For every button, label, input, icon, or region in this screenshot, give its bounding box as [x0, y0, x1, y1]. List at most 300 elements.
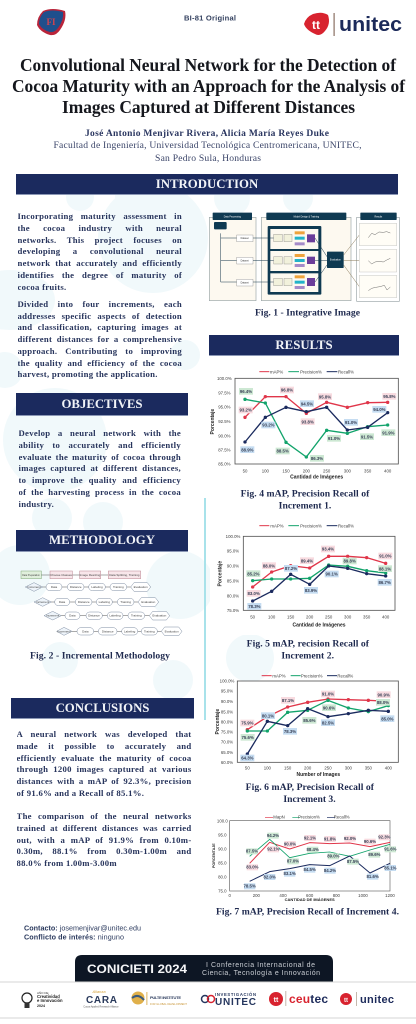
logo: unitec small: unitec: [360, 994, 394, 1006]
increment 1: Training: [113, 585, 124, 589]
increment 4: Training: [144, 629, 155, 633]
axes: 95.0%: [221, 689, 233, 694]
text: introduction: the quality and efficiency of the cocoa: [18, 358, 182, 368]
data labels: [246, 546, 392, 610]
legend: [259, 523, 354, 528]
increment 2: Training: [120, 600, 131, 604]
axes: 200: [306, 615, 314, 620]
axes: 200: [303, 468, 311, 473]
axes: CANTIDAD DE IMÁGENES: [285, 897, 335, 902]
logo: investigación unitec: UNITEC: [215, 997, 256, 1008]
text: introduction: [18, 211, 182, 379]
increment 2: Data: [59, 600, 65, 604]
increment 4: Labeling: [124, 629, 136, 633]
axes: 300: [345, 766, 353, 771]
heading: methodology: METHODOLOGY: [49, 533, 155, 547]
logo: pulte institute: FOR GLOBAL DEVELOPMENT: [150, 1002, 187, 1006]
axes: 75.0%: [227, 608, 239, 613]
text: conclusions: distances with a mAP of 92.3%, precision: [16, 776, 192, 786]
axes: 80.0: [218, 875, 227, 880]
data labels: 82.5%: [322, 720, 334, 725]
legend: Precision%: [300, 523, 322, 528]
legend: MapN: [273, 815, 285, 820]
data labels: 87.5%: [347, 859, 359, 864]
data labels: 89.6%: [368, 852, 381, 857]
chart: fig 6 increment 3: [215, 673, 399, 805]
heading: results: [209, 335, 399, 355]
axes: 100: [264, 766, 272, 771]
data labels: 93.4%: [322, 547, 334, 552]
text: conclusions: The comparison of the neural networks: [16, 811, 192, 821]
contact block: Conflicto de interés: ninguno: [24, 932, 124, 942]
axes: 85.0: [218, 861, 227, 866]
caption: fig 6: [246, 782, 375, 805]
axes: 65.0%: [221, 750, 233, 755]
increment 3: Training: [131, 614, 142, 618]
data labels: 87.5%: [246, 849, 258, 854]
axes: 150: [282, 468, 290, 473]
caption: fig 5: Increment 2.: [281, 650, 334, 661]
axes: 90.0%: [221, 699, 233, 704]
data labels: 88.0%: [377, 700, 389, 705]
data labels: 82.0%: [264, 874, 276, 879]
data labels: 96.4%: [240, 389, 252, 394]
text: introduction: Divided into four increments, each: [18, 299, 182, 309]
data labels: 91.5%: [361, 434, 373, 439]
data labels: 83.1%: [284, 871, 296, 876]
axes: 90.0%: [227, 564, 239, 569]
axes: 300: [344, 468, 352, 473]
axes: 200: [304, 766, 312, 771]
axes: 95.0%: [218, 405, 231, 410]
legend: Recall%: [338, 523, 354, 528]
data labels: 91.8%: [324, 836, 336, 841]
preparation row: [21, 571, 141, 579]
logo: ceutec: [269, 991, 328, 1006]
conference banner: [75, 955, 333, 982]
logo: faculty shield: [37, 9, 66, 36]
increment 3: [44, 611, 170, 620]
legend: mAP%: [272, 673, 286, 678]
data labels: 78.5%: [244, 884, 256, 889]
axes: 300: [344, 615, 352, 620]
text: objectives: images captured at different distances,: [18, 463, 181, 473]
axes: 75.0: [218, 889, 227, 894]
legend: [265, 815, 350, 820]
axes: Cantidad de Imágenes: [292, 623, 346, 629]
data labels: 87.0%: [287, 859, 299, 864]
data labels: 93.2%: [262, 423, 275, 428]
data labels: 75.6%: [242, 735, 254, 740]
axes: [215, 679, 398, 778]
axes: [212, 818, 395, 902]
logo: CARA: Alianza: [91, 989, 106, 994]
data labels: 86.3%: [311, 456, 323, 461]
axes: 90.0%: [218, 433, 231, 438]
axes: 150: [284, 766, 292, 771]
text: introduction: the cocoa industry with neural: [18, 223, 182, 233]
logo: CARA: Cocoa Applied Research Alliance: [83, 1006, 119, 1008]
axes: 100: [268, 615, 276, 620]
data labels: 95.8%: [383, 394, 396, 399]
axes: 250: [325, 615, 333, 620]
axes: 100: [262, 468, 270, 473]
legend: Precision%: [301, 673, 323, 678]
axes: 60.0%: [221, 760, 233, 765]
data labels: [244, 833, 397, 889]
caption: fig 4: Fig. 4 mAP, Precision Recall of: [241, 489, 370, 500]
logo: unitec small: [340, 992, 394, 1006]
data labels: 96.8%: [281, 388, 293, 393]
data labels: 81.6%: [367, 874, 379, 879]
data labels: 87.2%: [285, 566, 297, 571]
data labels: 85.2%: [247, 571, 260, 576]
caption: fig 2: Fig. 2 - Incremental Methodology: [30, 651, 170, 662]
legend: [262, 673, 353, 678]
text: introduction: identifies the degree of maturity of: [18, 270, 182, 280]
authors and affiliation: [54, 129, 362, 164]
caption: fig 4: [241, 489, 370, 511]
data labels: 85.0%: [381, 716, 394, 721]
increment 1: Labeling: [91, 585, 103, 589]
data labels: 83.0%: [246, 865, 259, 870]
text: conclusions: trained at different distances was carried: [16, 823, 192, 833]
axes: Porcentaje: [210, 409, 216, 434]
data labels: 78.3%: [248, 604, 261, 609]
axes: 250: [323, 468, 331, 473]
increment 3: Evaluation: [152, 614, 167, 618]
axes: 400: [385, 766, 393, 771]
text: conclusions: made it possible to accurately and: [16, 741, 192, 751]
data labels: 64.3%: [241, 756, 254, 761]
data labels: 91.0%: [328, 436, 340, 441]
text: objectives: to improve the quality and efficiency: [18, 475, 181, 485]
increment 2: Evaluation: [141, 600, 156, 604]
panel: data processing: Dataset: [241, 237, 249, 240]
legend: Precision%: [300, 369, 322, 374]
legend: Recall%: [334, 815, 350, 820]
caption: fig 5: Fig. 5 mAP, recision Recall of: [247, 639, 370, 650]
increment 4: [57, 627, 182, 636]
data labels: 75.9%: [241, 721, 254, 726]
axes: 350: [363, 615, 371, 620]
axes: 95.0: [218, 832, 227, 837]
axes: 400: [382, 615, 390, 620]
logo: unitec small: tt: [344, 998, 348, 1004]
footer logo strip: [0, 982, 416, 1018]
axes: 200: [253, 893, 261, 898]
axes: [210, 376, 398, 481]
axes: 90.0: [218, 846, 227, 851]
data labels: 91.0%: [322, 692, 334, 697]
caption: fig 6: Increment 3.: [283, 794, 336, 805]
increment 2: Increment: [36, 600, 50, 604]
panel: model design and training: Evaluation: [330, 258, 341, 261]
series: mAP: [245, 397, 388, 417]
data labels: 88.9%: [241, 447, 254, 452]
caption: fig 6: Fig. 6 mAP, Precision Recall of: [246, 782, 375, 793]
authors and affiliation: José Antonio Menjivar Rivera, Alicia María Reyes Duke: [85, 129, 329, 139]
axes: Number of Images: [297, 772, 340, 778]
title: Images Captured at Different Distances: [62, 97, 355, 117]
text: introduction: and classification, capturing images at: [18, 322, 182, 332]
increment 1: Increment: [27, 585, 41, 589]
axes: [218, 534, 395, 629]
axes: 80.0%: [227, 593, 239, 598]
axes: 0: [228, 893, 231, 898]
text: introduction: network that accurately and efficiently: [18, 258, 182, 268]
legend: Precision%: [298, 815, 320, 820]
axes: 350: [365, 766, 373, 771]
logo: ceutec: ceutec: [289, 992, 328, 1006]
axes: 97.5%: [218, 390, 231, 395]
preparation row: Data Splitting, Training: [109, 573, 140, 577]
text: objectives: ability to accurately and efficiently: [18, 440, 181, 450]
logo: ceutec: tt: [274, 997, 279, 1004]
data labels: 94.2%: [267, 833, 279, 838]
panel: model design and training: Model Design & Training: [294, 215, 320, 218]
data labels: 91.9%: [382, 430, 395, 435]
data labels: 87.1%: [282, 698, 294, 703]
axes: PORCENTAJE: [212, 843, 216, 868]
logo: pulte institute: PULTE INSTITUTE: [150, 995, 181, 1000]
logo: pulte institute: [132, 992, 187, 1006]
title: Cocoa Maturity with an Approach for the Analysis of: [12, 76, 405, 96]
axes: 1000: [358, 893, 368, 898]
legend: [259, 369, 354, 374]
heading: results: RESULTS: [275, 338, 333, 352]
data labels: 88.0%: [263, 563, 275, 568]
axes: 80.0%: [221, 719, 233, 724]
data labels: 88.5%: [277, 449, 289, 454]
data labels: 90.0%: [284, 841, 296, 846]
axes: 50: [250, 615, 256, 620]
logo: año de creatividad: [22, 990, 63, 1008]
panel: data processing: [209, 213, 256, 301]
data labels: 78.3%: [284, 729, 296, 734]
series: recall: [245, 407, 388, 442]
data labels: 93.2%: [240, 408, 252, 413]
text: introduction: harvest, promoting the application.: [18, 369, 158, 379]
panel: data processing: Dataset: [241, 281, 249, 284]
data labels: 86.7%: [379, 580, 391, 585]
logo: unitec: tt: [312, 18, 320, 32]
data labels: 90.6%: [323, 705, 335, 710]
text: conclusions: 88.0% from 1.00m-3.00m: [16, 858, 117, 868]
panel: results graphs: Results: [374, 215, 383, 218]
legend: mAP%: [270, 369, 283, 374]
contact block: [24, 924, 141, 942]
data labels: 91.6%: [384, 847, 397, 852]
logo: unitec: [304, 12, 402, 36]
increment 3: Labeling: [109, 614, 121, 618]
series: precision: [253, 565, 386, 581]
series: precision: [250, 839, 390, 858]
data labels: 89.8%: [344, 559, 356, 564]
data labels: 92.3%: [378, 835, 391, 840]
logo: año de creatividad: Creatividad: [37, 994, 60, 999]
axes: 75.0%: [221, 730, 233, 735]
axes: 92.5%: [218, 419, 231, 424]
text: introduction: approach. Contributing to improving: [18, 346, 182, 356]
text: objectives: industry.: [18, 498, 54, 508]
panel: incremental methodology diagram: [20, 570, 182, 662]
preparation row: Data Preparation: [22, 574, 41, 577]
caption: fig 1: Fig. 1 - Integrative Image: [255, 307, 361, 318]
axes: 1200: [385, 893, 395, 898]
data labels: 90.9%: [378, 692, 390, 697]
caption: fig 4: Increment 1.: [279, 500, 331, 511]
axes: 100.0%: [220, 679, 234, 684]
heading: methodology: [16, 530, 188, 551]
increment 2: Labeling: [99, 600, 110, 604]
increment 4: Data: [82, 629, 89, 633]
axes: Porcentaje: [215, 709, 221, 734]
panel: data processing: Dataset: [241, 259, 249, 262]
data labels: 83.9%: [305, 588, 317, 593]
text: introduction: Incorporating maturity assessment in: [18, 211, 182, 221]
conference banner: I Conferencia Internacional de: [206, 962, 315, 969]
axes: 800: [333, 893, 341, 898]
data labels: 92.0%: [344, 836, 356, 841]
axes: 400: [279, 893, 287, 898]
axes: 100.0%: [226, 534, 240, 539]
axes: 50: [245, 766, 250, 771]
text: conclusions: through 1200 images captured at various: [16, 764, 192, 774]
series: precision: [247, 700, 388, 731]
data labels: 88.1%: [379, 566, 391, 571]
data labels: 89.0%: [327, 854, 340, 859]
axes: 87.5%: [218, 448, 231, 453]
text: introduction: cocoa fruits.: [18, 282, 66, 292]
series: mAP: [247, 699, 388, 730]
heading: conclusions: CONCLUSIONS: [56, 701, 149, 715]
logo: investigación unitec: [202, 992, 256, 1008]
text: introduction: addresses specific aspects of detection: [18, 310, 182, 320]
increment 1: Evaluation: [134, 585, 148, 589]
heading: introduction: INTRODUCTION: [156, 177, 258, 191]
axes: 350: [364, 468, 372, 473]
increment 1: Distance: [70, 585, 82, 589]
data labels: 93.8%: [302, 419, 314, 424]
increment 4: Increment: [57, 629, 71, 633]
increment 3: Increment: [46, 614, 60, 618]
logo: CARA: CARA: [86, 995, 117, 1006]
increment 3: Data: [69, 614, 76, 618]
text: objectives: Develop a neural network with the: [18, 428, 181, 438]
axes: 100.0%: [217, 376, 232, 381]
axes: 400: [384, 468, 392, 473]
authors and affiliation: Facultad de Ingeniería, Universidad Tecnológica Centromericana, UNITEC,: [54, 140, 362, 151]
increment 1: [25, 583, 151, 591]
text: conclusions: [16, 729, 192, 868]
axes: 70.0%: [221, 740, 233, 745]
series: mAP: [253, 556, 386, 587]
text: conclusions: A neural network was developed that: [16, 729, 192, 739]
chart: fig 5 increment 2: [210, 523, 396, 661]
authors and affiliation: San Pedro Sula, Honduras: [155, 153, 261, 164]
heading: conclusions: [11, 698, 194, 718]
logo: investigación unitec: INVESTIGACIÓN: [215, 992, 256, 997]
panel: model design and training: [253, 213, 351, 301]
heading: introduction: [16, 174, 398, 194]
increment 1: Data: [51, 585, 57, 589]
axes: 600: [306, 893, 314, 898]
data labels: 94.0%: [373, 407, 386, 412]
series: recall: [247, 709, 388, 754]
axes: 85.0%: [218, 462, 231, 467]
chart: fig 7 increment 4: [212, 815, 399, 918]
axes: 250: [324, 766, 332, 771]
data labels: 84.2%: [324, 868, 336, 873]
data labels: 84.5%: [304, 867, 316, 872]
axes: 95.0%: [227, 549, 239, 554]
event label: BI-81 Original: [184, 14, 236, 22]
logo: unitec: unitec: [339, 14, 402, 36]
axes: 50: [243, 468, 248, 473]
contact block: Contacto: josemenjivar@unitec.edu: [24, 924, 141, 932]
conference banner: CONICIETI 2024: [87, 964, 188, 976]
title: Convolutional Neural Network for the Detection of: [20, 55, 396, 75]
axes: 85.0%: [221, 709, 233, 714]
data labels: 80.1%: [262, 713, 274, 718]
chart: fig 4 increment 1: [210, 369, 399, 511]
increment 2: Distance: [78, 600, 90, 604]
preparation row: Choose Classes: [50, 573, 72, 577]
data labels: [239, 387, 396, 462]
logo: faculty shield: FI: [46, 17, 56, 27]
logo: año de creatividad: AÑO DE: [37, 990, 49, 995]
figure: integrative image: [209, 212, 400, 318]
axes: 150: [287, 615, 295, 620]
text: introduction: developing a convolutional neural: [18, 246, 182, 256]
preparation row: Image Resizing: [80, 573, 101, 577]
data labels: 83.0%: [248, 591, 260, 596]
text: objectives: [18, 428, 181, 509]
text: introduction: networks. This project focuses on: [18, 234, 182, 244]
data labels: 89.4%: [301, 558, 313, 563]
data labels: 85.6%: [303, 718, 316, 723]
legend: Recall%: [337, 673, 353, 678]
text: introduction: different distances for a comprehensive: [18, 334, 182, 344]
data labels: 94.5%: [301, 401, 313, 406]
logo: año de creatividad: 2024: [37, 1004, 45, 1008]
caption: fig 7: Fig. 7 mAP, Precision Recall of Increment 4.: [216, 907, 399, 918]
data labels: 85.1%: [384, 865, 397, 870]
increment 4: Distance: [102, 629, 114, 633]
legend: mAP%: [270, 523, 284, 528]
data labels: 88.4%: [307, 847, 319, 852]
series: recall: [253, 566, 386, 601]
legend: Recall%: [338, 369, 354, 374]
caption: fig 5: [247, 639, 370, 661]
series: precision: [245, 399, 388, 457]
data labels: 91.0%: [345, 420, 357, 425]
data labels: 90.1%: [326, 572, 338, 577]
data labels: 92.1%: [267, 847, 280, 852]
text: conclusions: efficiently evaluate the maturity of cocoa: [16, 752, 192, 762]
text: objectives: of the harvesting process in the cocoa: [18, 487, 181, 497]
axes: Cantidad de Imágenes: [290, 475, 343, 481]
data labels: 95.8%: [319, 394, 331, 399]
logo: año de creatividad: e Innovación: [37, 998, 63, 1003]
text: conclusions: out, with a mAP of 91.9% from 0.10m-: [16, 834, 192, 844]
axes: Porcentaje: [218, 561, 224, 586]
increment 4: Evaluation: [165, 629, 179, 633]
logo: CARA: [83, 989, 119, 1008]
title: [12, 55, 406, 117]
panel: results graphs: [344, 213, 399, 301]
